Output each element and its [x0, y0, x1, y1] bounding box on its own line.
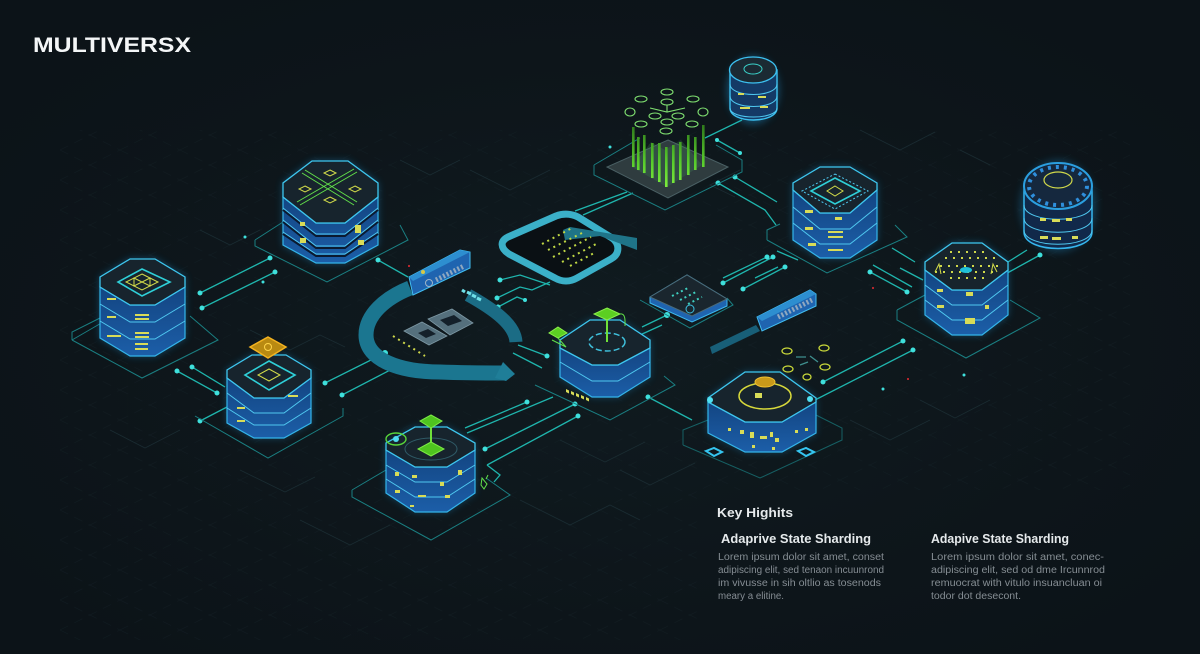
- stack: gold-topped node: [227, 337, 311, 438]
- column: left: Adaprive State Sharding: [721, 531, 871, 546]
- icon: gold diamond: [250, 337, 286, 358]
- title: MULTIVERSX: [33, 34, 191, 57]
- cylinder: top: [727, 56, 779, 124]
- stack: low octagon node: [706, 372, 816, 456]
- column: left: im vivusse in sih oltlio as tosenods: [718, 578, 881, 589]
- stack: upper right node: [793, 167, 877, 258]
- column: right: remuocrat with vitulo insuancluan oi: [931, 578, 1102, 589]
- ring panel with arrow: [502, 214, 637, 281]
- bar module: right with tail: [710, 290, 816, 354]
- stack: bottom center node: [386, 415, 488, 512]
- connector lines: [174, 120, 1042, 482]
- small keypad panel: [650, 275, 727, 322]
- network nodes: [625, 89, 708, 134]
- green chip with bars: [607, 89, 728, 198]
- column: right: todor dot desecont.: [931, 591, 1021, 602]
- column: right: Adapive State Sharding: [931, 531, 1069, 546]
- bar module: left: [409, 250, 470, 295]
- stack: right node: [925, 243, 1008, 335]
- column: left: [718, 531, 884, 602]
- column: left: adipiscing elit, sed tenaon incuunrond: [718, 565, 884, 576]
- column: right: Lorem ipsum dolor sit amet, conec-: [931, 552, 1104, 563]
- key highlights panel: [717, 505, 1105, 602]
- tiles: [404, 309, 473, 345]
- big curved arrow: [366, 288, 516, 381]
- column: left: meary a elitine.: [718, 591, 784, 602]
- column: right: [931, 531, 1105, 602]
- floating network nodes: [782, 345, 830, 380]
- platform outlines: [72, 138, 1040, 540]
- cylinder: right: [1020, 160, 1096, 252]
- column: right: adipiscing elit, sed od dme Ircunnrod: [931, 565, 1105, 576]
- stack: top-left node with green cross: [283, 161, 378, 263]
- column: left: Lorem ipsum dolor sit amet, conset: [718, 552, 884, 563]
- heading: key highlights: Key Highits: [717, 505, 793, 520]
- stack: left node: [100, 259, 185, 356]
- stack: center node: [549, 308, 650, 402]
